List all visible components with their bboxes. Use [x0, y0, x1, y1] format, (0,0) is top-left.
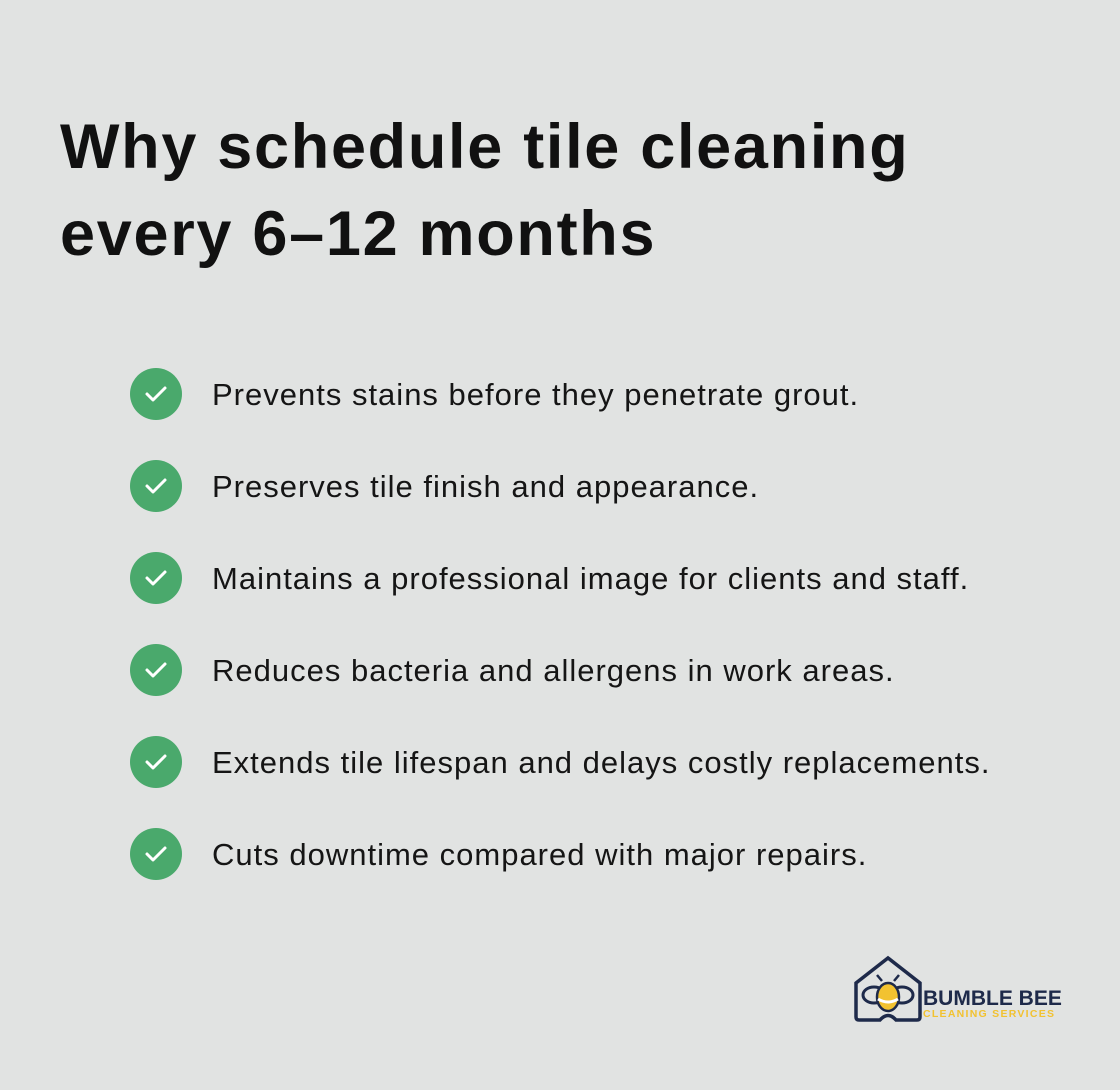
title: every 6–12 months — [60, 199, 656, 269]
title: Why schedule tile cleaning — [60, 112, 909, 182]
title — [60, 112, 909, 269]
item 2 — [130, 460, 759, 512]
item 2: Preserves tile finish and appearance. — [212, 469, 759, 504]
item 4: Reduces bacteria and allergens in work areas. — [212, 653, 895, 688]
item 1: Prevents stains before they penetrate grout. — [212, 377, 859, 412]
logo: BUMBLE BEE — [923, 987, 1062, 1010]
item 5: Extends tile lifespan and delays costly replacements. — [212, 745, 990, 780]
item 4 — [130, 644, 895, 696]
item 6 — [130, 828, 867, 880]
item 6: Cuts downtime compared with major repairs. — [212, 837, 867, 872]
item 3 — [130, 552, 969, 604]
item 3: Maintains a professional image for clients and staff. — [212, 561, 969, 596]
logo: CLEANING SERVICES — [923, 1008, 1054, 1020]
item 5 — [130, 736, 990, 788]
logo — [854, 956, 1062, 1022]
item 1 — [130, 368, 859, 420]
